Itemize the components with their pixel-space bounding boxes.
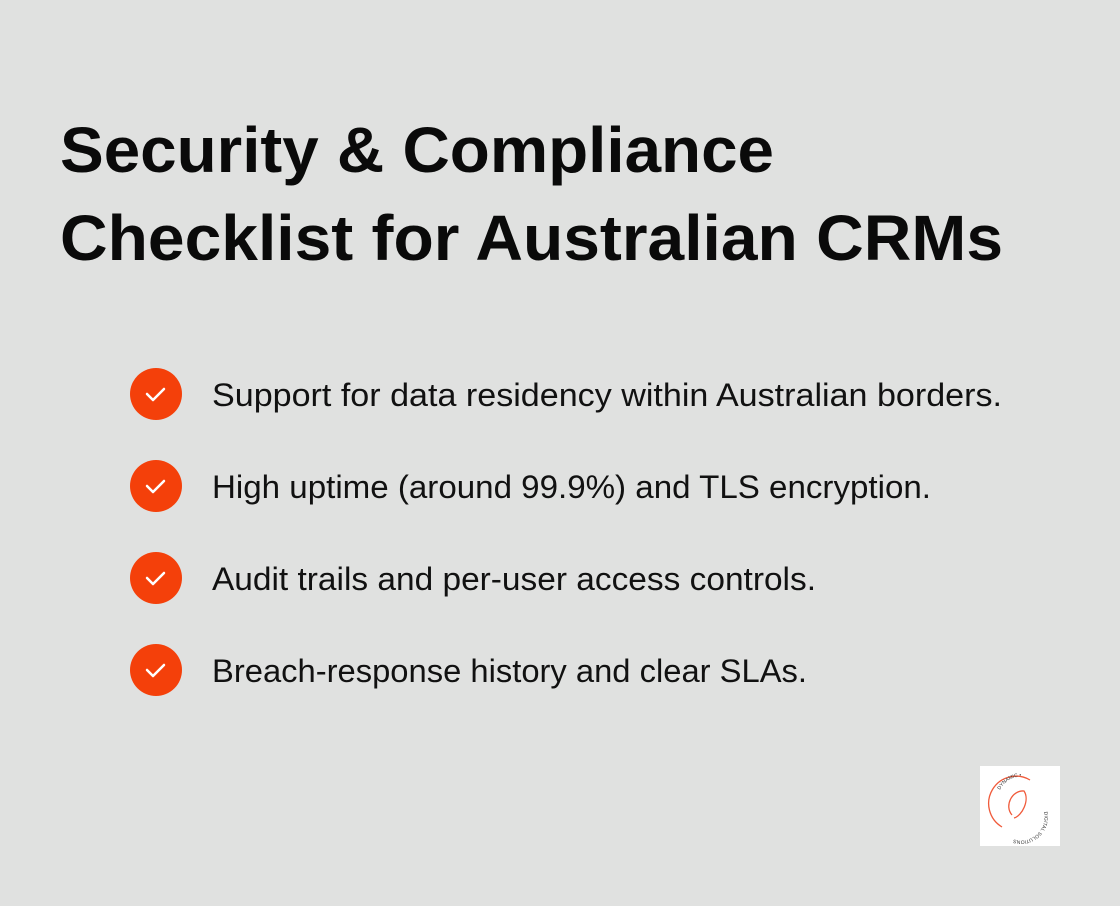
logo: DIGITAL SOLUTIONS bbox=[1013, 812, 1048, 844]
item 1: Support for data residency within Australian borders. bbox=[212, 377, 1002, 413]
checklist bbox=[130, 368, 1002, 696]
item 1 bbox=[130, 368, 1002, 420]
item 4 bbox=[130, 644, 807, 696]
item 3: Audit trails and per-user access controls. bbox=[212, 561, 816, 597]
item 4: Breach-response history and clear SLAs. bbox=[212, 653, 807, 689]
item 2 bbox=[130, 460, 931, 512]
item 3 bbox=[130, 552, 816, 604]
title: Security & Compliance bbox=[60, 114, 774, 186]
logo: DYNAMIC • bbox=[997, 774, 1021, 790]
title: Checklist for Australian CRMs bbox=[60, 202, 1003, 274]
item 2: High uptime (around 99.9%) and TLS encryption. bbox=[212, 469, 931, 505]
title bbox=[60, 114, 1003, 274]
logo bbox=[980, 766, 1060, 846]
